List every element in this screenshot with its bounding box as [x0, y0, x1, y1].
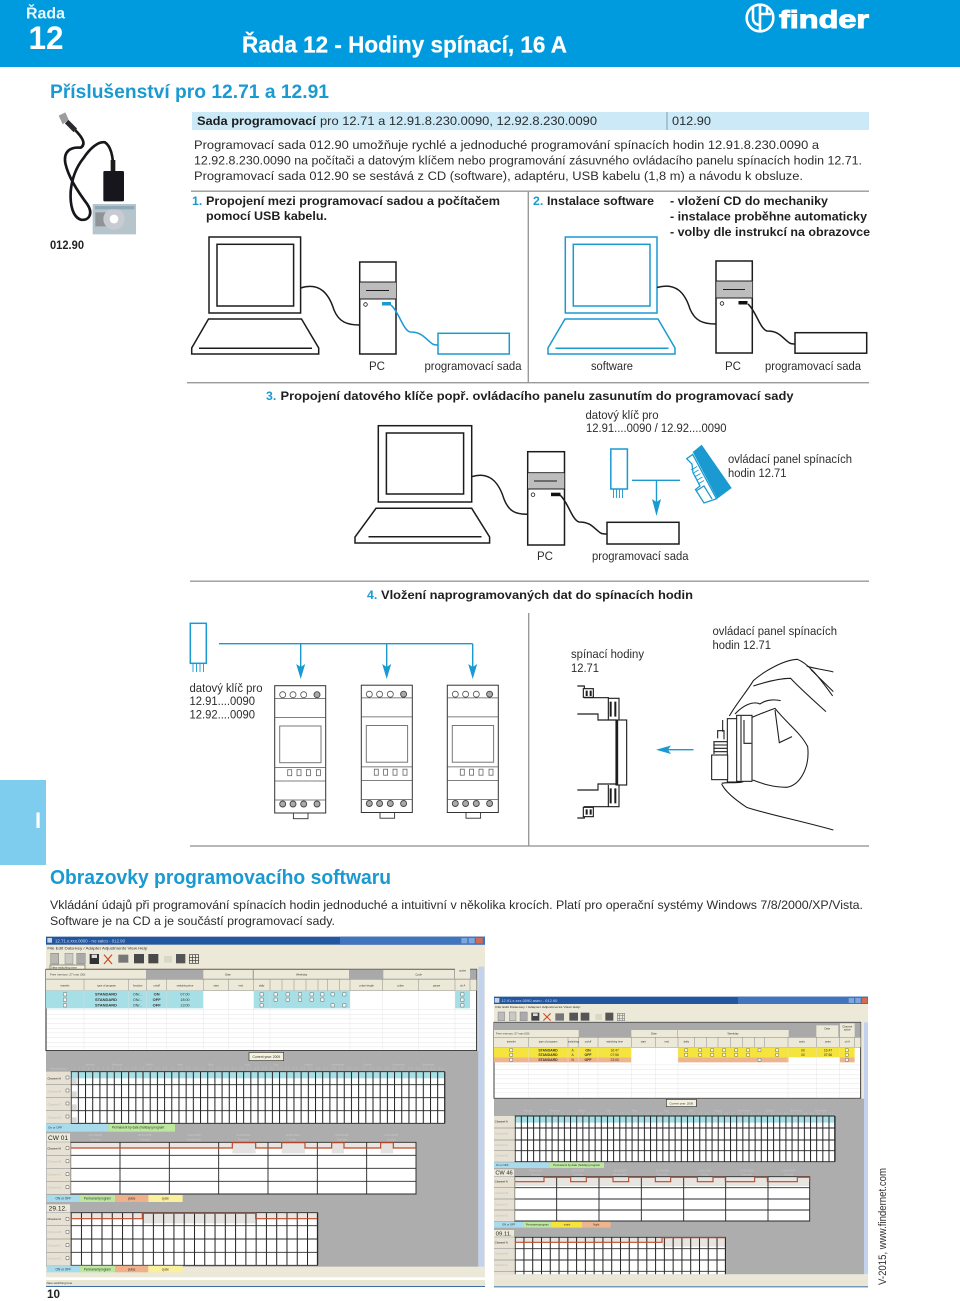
status bar	[494, 1274, 868, 1287]
program table: 16:47	[824, 1048, 832, 1052]
weekly chart: 03/01/2009	[335, 1133, 349, 1137]
program table: OFF	[153, 1003, 161, 1008]
program table: daily	[684, 1040, 690, 1044]
legend weekly	[494, 1222, 611, 1228]
program table: on/off	[585, 1040, 592, 1044]
product bar: 012.90	[672, 114, 711, 128]
month labels: August	[304, 1062, 313, 1066]
label control panel: hodin 12.71	[712, 638, 771, 652]
page number: 10	[47, 1287, 60, 1301]
PC tower	[528, 452, 564, 545]
legend weekly: matin	[564, 1223, 571, 1227]
finder logo: finder	[779, 6, 869, 34]
screenshot 2: 12.91 software window	[494, 997, 868, 1287]
month labels	[50, 1062, 443, 1070]
step 1 diagram	[192, 237, 522, 373]
legend date program: Permanent by date (holiday) program	[553, 1163, 601, 1167]
step 2 heading	[533, 194, 870, 239]
side tab: I	[35, 808, 41, 833]
daily chart: Channel B	[47, 1230, 61, 1234]
title bar	[494, 997, 868, 1004]
daily chart: 09.11.	[496, 1231, 512, 1237]
label control panel: hodin 12.71	[728, 466, 787, 480]
weekly chart: Channel B	[495, 1191, 508, 1195]
title bar: 12.91.x.xxx.0090-astro - 012.90	[501, 998, 558, 1003]
daily chart: Channel C	[495, 1263, 508, 1267]
step 4 right diagram: panel into 12.71	[571, 624, 837, 830]
legend weekly: ON or OFF	[56, 1197, 71, 1201]
year calendar grid	[494, 1116, 836, 1162]
month labels: January	[85, 1062, 95, 1066]
title bar	[46, 937, 485, 945]
distribution arrows	[219, 644, 477, 679]
grey work area	[494, 1099, 864, 1274]
legend weekly: cycle	[162, 1197, 169, 1201]
step 1 heading	[192, 194, 500, 223]
weekly chart: 11/11/2009	[614, 1168, 627, 1172]
program table: Channel	[842, 1024, 853, 1028]
program table: type of program	[97, 984, 117, 988]
daily chart: Channel A	[495, 1240, 508, 1244]
weekly chart: 31/12/2008	[187, 1133, 201, 1137]
right scrollbar	[478, 967, 484, 1267]
year calendar grid: Channel D	[495, 1154, 508, 1158]
step 2 heading: Instalace software	[547, 194, 654, 208]
program table: STANDARD	[95, 1003, 117, 1008]
label programming kit: programovací sada	[765, 359, 861, 373]
step 2 heading: - instalace proběhne automaticky	[670, 210, 867, 224]
daily chart	[494, 1230, 726, 1274]
label control panel: ovládací panel spínacích	[712, 624, 837, 638]
program table: OFF	[585, 1058, 591, 1062]
status bar	[46, 1273, 485, 1287]
label control panel	[712, 624, 837, 652]
programming kit	[438, 333, 509, 354]
program table: 23:00	[610, 1058, 619, 1062]
cable: monitor to PC	[472, 475, 528, 514]
program table: 07:00	[180, 992, 190, 996]
program table: function	[133, 984, 143, 988]
month labels: January	[523, 1108, 533, 1112]
toolbar icons	[51, 953, 199, 964]
weekly chart	[494, 1168, 810, 1221]
legend weekly: Night	[593, 1223, 600, 1227]
current year label: Current year: 2009	[252, 1055, 280, 1059]
current year label: Current year: 2009	[670, 1101, 694, 1105]
label timer: 12.71	[571, 661, 599, 675]
header band	[0, 0, 960, 67]
grey work area	[46, 1051, 478, 1267]
daily chart: Channel B	[495, 1252, 508, 1256]
computer monitor	[378, 426, 472, 502]
weekly chart: Thursday	[238, 1138, 250, 1142]
program table: start	[641, 1040, 646, 1044]
keyboard	[548, 319, 675, 354]
legend daily: pulse	[128, 1267, 136, 1271]
product code: 012.90	[50, 238, 84, 252]
month labels: May	[632, 1108, 638, 1112]
version and website: V-2015, www.findernet.com	[877, 1168, 889, 1285]
program table: Date	[225, 972, 231, 976]
year calendar grid: Channel C	[47, 1102, 62, 1106]
program table: N	[571, 1058, 574, 1062]
program table: ch A	[460, 984, 465, 988]
weekly chart: Channel A	[495, 1180, 508, 1184]
program table: OFF	[585, 1053, 591, 1057]
label data key	[586, 408, 727, 435]
month labels: September	[737, 1108, 751, 1112]
step 2 diagram	[548, 237, 867, 373]
legend date program	[494, 1162, 604, 1168]
program table: transfer	[60, 984, 70, 988]
program table: type of program	[539, 1040, 558, 1044]
legend weekly: pulse	[128, 1197, 136, 1201]
label data key: datový klíč pro	[586, 408, 659, 422]
daily chart: Channel C	[47, 1243, 62, 1247]
menu bar: File Edit Data-key / Adapter Adjustments View Help	[47, 947, 148, 951]
label data key: datový klíč pro	[190, 681, 263, 695]
year calendar grid: Channel A	[47, 1076, 61, 1080]
program table: 13:00	[180, 1004, 190, 1008]
year calendar grid: Channel D	[47, 1115, 62, 1119]
program table: pulse length	[359, 984, 374, 988]
month labels: July	[688, 1108, 694, 1112]
section heading: software screens: Obrazovky programovacího softwaru	[50, 867, 391, 889]
month labels: September	[331, 1062, 344, 1066]
program table: daily	[259, 984, 265, 988]
weekly chart: 15/11/2009	[782, 1168, 796, 1172]
weekly chart: 04/01/2009	[385, 1133, 398, 1137]
section intro text: Software je na CD a je součástí programovací sady.	[50, 914, 335, 928]
weekly chart: 02/01/2009	[286, 1133, 300, 1137]
program table: ch A	[845, 1040, 850, 1044]
program table: ON/...	[133, 1004, 142, 1008]
program table	[46, 967, 477, 1051]
toolbar icons	[498, 1012, 625, 1021]
step 1 heading: 1.	[192, 194, 202, 208]
month labels: 1 2 3 4 5 6 7 8 9 10 11 12 13 14 15 16 17 18 19 20 21 22 23 24 25 26 27 28 29 30 31 32 33 34 35 36 37 38 39 40 41 42 43 44 45 46 47 48 49 50 51 52	[517, 1114, 834, 1116]
weekly chart: Wednesday	[613, 1172, 628, 1176]
label timer	[571, 647, 645, 675]
program table: switching time	[177, 984, 194, 988]
step 4 heading: Vložení naprogramovaných dat do spínacích hodin	[381, 588, 693, 602]
program table: on/off	[153, 984, 160, 988]
step 4 heading: 4.	[367, 588, 377, 602]
weekly chart: 09/11/2009	[529, 1168, 543, 1172]
label PC: PC	[725, 359, 741, 373]
weekly chart: Tuesday	[140, 1138, 150, 1142]
programming kit	[607, 522, 679, 544]
daily chart: Channel D	[47, 1256, 62, 1260]
label PC: PC	[369, 359, 385, 373]
daily chart: Channel A	[47, 1217, 61, 1221]
side tab	[0, 780, 46, 865]
program table: astro	[825, 1040, 831, 1044]
series label: Řada	[26, 4, 65, 22]
status bar: New switching time	[47, 1281, 73, 1285]
description text: 12.92.8.230.0090 na počítači a datovým klíčem nebo programování zásuvného ovládacího panelu spínacích hodin 12.71.	[194, 154, 862, 168]
current year label	[249, 1052, 284, 1061]
legend daily: ON or OFF	[56, 1267, 71, 1271]
weekly chart: CW 01	[48, 1135, 68, 1142]
weekly chart: Wednesday	[187, 1138, 202, 1142]
program table: STANDARD	[95, 991, 117, 996]
data key	[190, 623, 206, 672]
program table: STANDARD	[538, 1048, 558, 1052]
PC tower	[716, 261, 752, 353]
weekly chart: Tuesday	[573, 1172, 584, 1176]
computer monitor with software	[565, 237, 657, 313]
right scrollbar	[864, 1022, 868, 1274]
month labels: October	[363, 1062, 372, 1066]
program table: STANDARD	[538, 1058, 558, 1062]
program table: active	[459, 968, 467, 972]
month labels: April	[606, 1108, 612, 1112]
program table: Weekday	[296, 972, 308, 976]
keyboard	[192, 319, 319, 354]
program table: pause	[433, 985, 441, 988]
weekly chart: 30/12/2008	[138, 1133, 152, 1137]
cable: PC to programming kit	[560, 495, 607, 534]
month labels: June	[244, 1062, 251, 1066]
program table: 00	[801, 1048, 805, 1052]
label PC: PC	[537, 549, 553, 563]
legend daily	[47, 1266, 183, 1272]
program table: pulse	[397, 984, 404, 988]
step 4 left diagram: key into timers	[190, 623, 498, 819]
weekly chart: Saturday	[741, 1172, 753, 1176]
tooltip: New switching time	[51, 965, 77, 969]
daily chart: 29.12.	[49, 1205, 67, 1212]
cable: monitor to PC	[301, 286, 360, 325]
label control panel: ovládací panel spínacích	[728, 452, 852, 466]
program table: switching time	[606, 1040, 624, 1044]
page title: Řada 12 - Hodiny spínací, 16 A	[242, 30, 567, 58]
step 1 heading: Propojení mezi programovací sadou a počítačem	[206, 194, 500, 208]
weekly chart: 10/11/2009	[571, 1168, 585, 1172]
PC tower	[360, 262, 396, 354]
program table: A	[572, 1053, 575, 1057]
section intro text	[50, 898, 863, 928]
timer side view	[577, 686, 627, 818]
month labels: July	[274, 1062, 279, 1066]
legend daily: Permanentprogram	[84, 1267, 111, 1271]
program table: ON/...	[133, 998, 142, 1002]
weekly chart	[47, 1133, 416, 1194]
month labels: December	[422, 1062, 435, 1066]
program table: active	[844, 1028, 851, 1032]
weekly chart: Thursday	[657, 1172, 669, 1176]
menu bar: File Edit Data-key / Adapter Adjustments View Help	[495, 1005, 581, 1009]
label programming kit: programovací sada	[592, 549, 689, 563]
timer 2	[361, 685, 412, 818]
legend date program: Permanent by date (holiday) program	[112, 1126, 165, 1130]
label programming kit: programovací sada	[424, 359, 522, 373]
year calendar grid: Channel B	[495, 1132, 508, 1136]
program table: 00	[801, 1053, 805, 1057]
legend weekly: ON or OFF	[502, 1223, 516, 1227]
month labels: March	[146, 1062, 154, 1066]
label data key: 12.91....0090	[190, 694, 255, 708]
program table: switching	[568, 1040, 579, 1044]
weekly chart: Sunday	[387, 1138, 397, 1142]
weekly chart: 12/11/2009	[656, 1168, 669, 1172]
program table: STANDARD	[95, 997, 117, 1002]
program table: 16:47	[610, 1048, 619, 1052]
weekly chart: Channel D	[47, 1186, 62, 1190]
year calendar grid: Channel B	[47, 1089, 61, 1093]
label control panel	[728, 452, 852, 480]
product photo: USB cable, adapter and CD	[59, 112, 136, 234]
month labels: February	[549, 1108, 561, 1112]
label data key: 12.92....0090	[190, 708, 255, 722]
legend date program	[46, 1124, 175, 1132]
weekly chart: Monday	[91, 1138, 101, 1142]
timer 3	[447, 685, 498, 818]
product bar	[192, 112, 869, 130]
tooltip	[50, 965, 85, 969]
program table: start	[213, 984, 219, 988]
program table: STANDARD	[538, 1053, 558, 1057]
arrow: insert panel	[656, 746, 694, 754]
step 2 heading: - vložení CD do mechaniky	[670, 194, 828, 208]
year calendar grid: Channel A	[495, 1120, 508, 1124]
label software: software	[591, 359, 633, 373]
cable: PC to programming kit	[748, 304, 795, 344]
month labels	[517, 1108, 834, 1116]
weekly chart: Channel C	[495, 1202, 508, 1206]
step 2 heading: - volby dle instrukcí na obrazovce	[670, 225, 870, 239]
cable: monitor to PC	[657, 286, 716, 324]
daily chart	[47, 1204, 318, 1265]
program table: ON	[154, 991, 160, 996]
step 1 heading: pomocí USB kabelu.	[206, 209, 327, 223]
month labels: Week number	[50, 1066, 67, 1070]
data key	[611, 449, 627, 498]
program table: Free memory: 57 max (60)	[496, 1032, 530, 1036]
current year label	[666, 1099, 696, 1107]
computer monitor	[209, 237, 301, 313]
month labels: May	[208, 1062, 214, 1066]
control panel	[687, 445, 732, 503]
program table: end	[664, 1040, 669, 1044]
weekly chart: CW 46	[495, 1171, 513, 1177]
month labels: December	[815, 1108, 828, 1112]
product bar: pro 12.71 a 12.91.8.230.0090, 12.92.8.230.0090	[320, 114, 597, 128]
legend weekly: Permanentprogram	[84, 1197, 111, 1201]
weekly chart: Friday	[701, 1172, 709, 1176]
description text: Programovací sada 012.90 umožňuje rychlé a jednoduché programování spínacích hodin 12.91.8.230.0090 a	[194, 138, 819, 152]
legend date program: On or OFF	[496, 1163, 509, 1167]
program table: 07:56	[824, 1053, 832, 1057]
program table	[494, 1022, 861, 1098]
program table: Cycle	[415, 972, 422, 976]
month labels: June	[663, 1108, 669, 1112]
month labels: November	[393, 1062, 405, 1066]
year calendar grid	[46, 1072, 445, 1123]
month labels: November	[790, 1108, 803, 1112]
month labels: October	[765, 1108, 775, 1112]
weekly chart: 01/01/2009	[237, 1133, 250, 1137]
month labels: 1 2 3 4 5 6 7 8 9 10 11 12 13 14 15 16 17 18 19 20 21 22 23 24 25 26 27 28 29 30 31 32 33 34 35 36 37 38 39 40 41 42 43 44 45 46 47 48 49 50 51 52	[73, 1066, 443, 1070]
description text: Programovací sada 012.90 se sestává z CD (software), adaptéru, USB kabelu (1,8 m) a návodu k obsluze.	[194, 169, 803, 183]
label timer: spínací hodiny	[571, 647, 645, 661]
legend weekly: Permanentprogram	[526, 1223, 550, 1227]
description text	[194, 138, 862, 183]
weekly chart: Channel A	[47, 1147, 61, 1151]
weekly chart: Channel C	[47, 1173, 62, 1177]
screenshot 1: 12.71 software window	[46, 937, 485, 1287]
weekly chart: 13/11/2009	[698, 1168, 712, 1172]
program table: transfer	[507, 1040, 516, 1044]
weekly chart: 14/11/2009	[740, 1168, 754, 1172]
hand holding control panel	[712, 659, 833, 830]
program table: end	[238, 984, 243, 988]
series number: 12	[28, 20, 64, 56]
weekly chart: Monday	[531, 1172, 541, 1176]
month labels: April	[177, 1062, 183, 1066]
section heading: accessories: Příslušenství pro 12.71 a 12.91	[50, 82, 329, 103]
program table: 18:00	[180, 998, 190, 1002]
step 3 heading: 3.	[266, 389, 276, 403]
cable: PC to programming kit	[391, 305, 438, 345]
program table: ON	[585, 1048, 591, 1052]
weekly chart: Channel D	[495, 1214, 508, 1218]
year calendar grid: Channel C	[495, 1143, 508, 1147]
programming kit	[795, 333, 867, 353]
label data key	[190, 681, 263, 722]
legend date program: On or OFF	[48, 1126, 62, 1130]
keyboard	[355, 508, 490, 543]
weekly chart: 29/12/2008	[89, 1133, 103, 1137]
program table: 07:56	[610, 1053, 619, 1057]
finder logo	[747, 5, 869, 34]
product bar: Sada programovací	[197, 114, 317, 128]
timer 1	[275, 686, 326, 819]
program table: ON/...	[133, 992, 142, 996]
program table: Free memory: 27 max (30)	[50, 972, 85, 976]
legend daily: cycle	[162, 1267, 169, 1271]
step 3 diagram	[355, 408, 852, 563]
month labels: March	[578, 1108, 586, 1112]
weekly chart: Channel B	[47, 1160, 61, 1164]
legend weekly	[47, 1195, 183, 1202]
weekly chart: Friday	[289, 1138, 297, 1142]
weekly chart: Sunday	[784, 1172, 794, 1176]
arrow: key or panel into kit	[632, 480, 680, 516]
program table: Weekday	[727, 1031, 739, 1035]
weekly chart: Saturday	[337, 1138, 348, 1142]
section intro text: Vkládání údajů při programování spínacích hodin jednoduché a intuitivní v několika krocích. Platí pro operační systémy Windows 7/8/2000/XP/Vista.	[50, 898, 863, 912]
program table: OFF	[153, 997, 161, 1002]
program table: Date	[825, 1026, 831, 1030]
month labels: August	[714, 1108, 722, 1112]
program table: astro	[799, 1040, 805, 1044]
month labels: February	[112, 1062, 123, 1066]
program table: Date	[651, 1031, 657, 1035]
step 3 heading: Propojení datového klíče popř. ovládacího panelu zasunutím do programovací sady	[280, 389, 794, 403]
program table: A	[572, 1048, 575, 1052]
step 2 heading: 2.	[533, 194, 543, 208]
label data key: 12.91....0090 / 12.92....0090	[586, 421, 727, 435]
title bar: 12.71.x.xxx.0000 - no satco - 012.90	[55, 938, 126, 943]
